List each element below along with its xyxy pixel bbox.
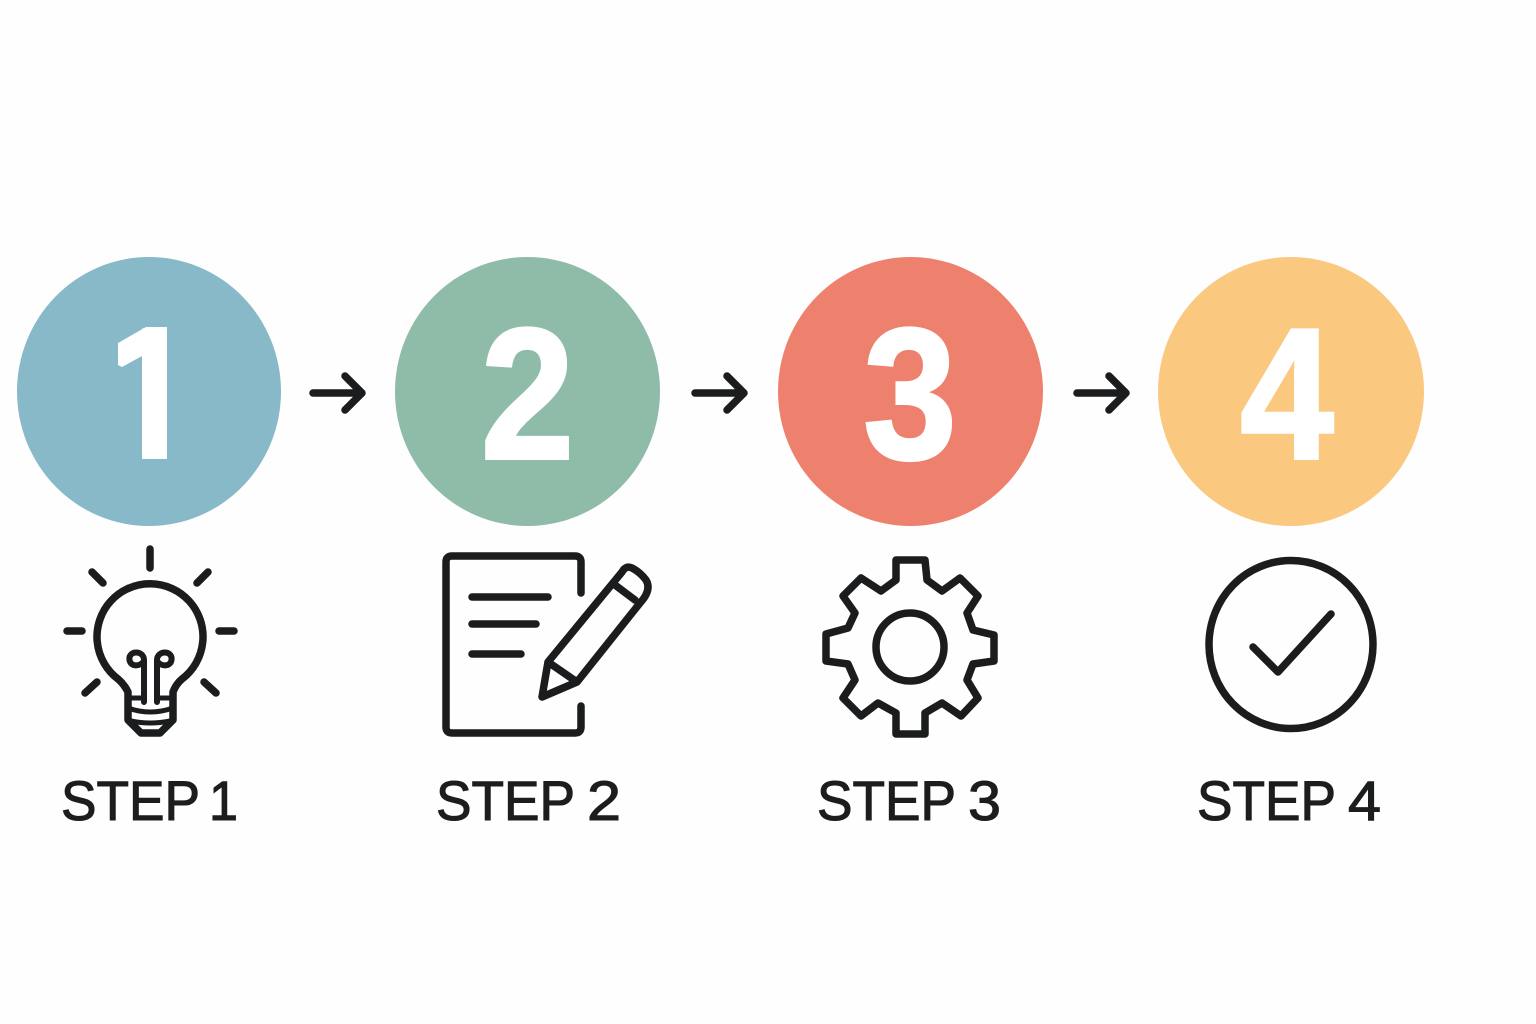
step 3 circle — [778, 257, 1043, 526]
label: step 3: 3 — [968, 769, 1001, 832]
label: step 3: STEP — [817, 769, 955, 832]
step 4 circle — [1158, 257, 1424, 526]
label: step 1: 1 — [209, 769, 238, 832]
step 3 circle: 3 — [863, 289, 957, 498]
label: step 2: STEP — [436, 769, 574, 832]
label: step 1: STEP — [61, 769, 199, 832]
arrow 3 to 4 — [1077, 376, 1126, 410]
label: step 4: 4 — [1348, 769, 1381, 832]
step 1 circle: 1 — [102, 289, 196, 498]
process flow — [17, 257, 1424, 821]
step 4 circle: 4 — [1240, 289, 1334, 498]
label: step 2: 2 — [587, 769, 621, 832]
step 2 circle — [395, 257, 660, 526]
icon: check in circle — [1209, 560, 1373, 728]
icon: gear — [826, 560, 994, 734]
step 1 circle — [17, 257, 281, 526]
arrow 2 to 3 — [695, 376, 744, 410]
icon: document with pencil — [446, 556, 648, 733]
arrow 1 to 2 — [313, 376, 362, 410]
label: step 4: STEP — [1197, 769, 1335, 832]
icon: light bulb — [67, 549, 234, 733]
step 2 circle: 2 — [481, 289, 574, 498]
